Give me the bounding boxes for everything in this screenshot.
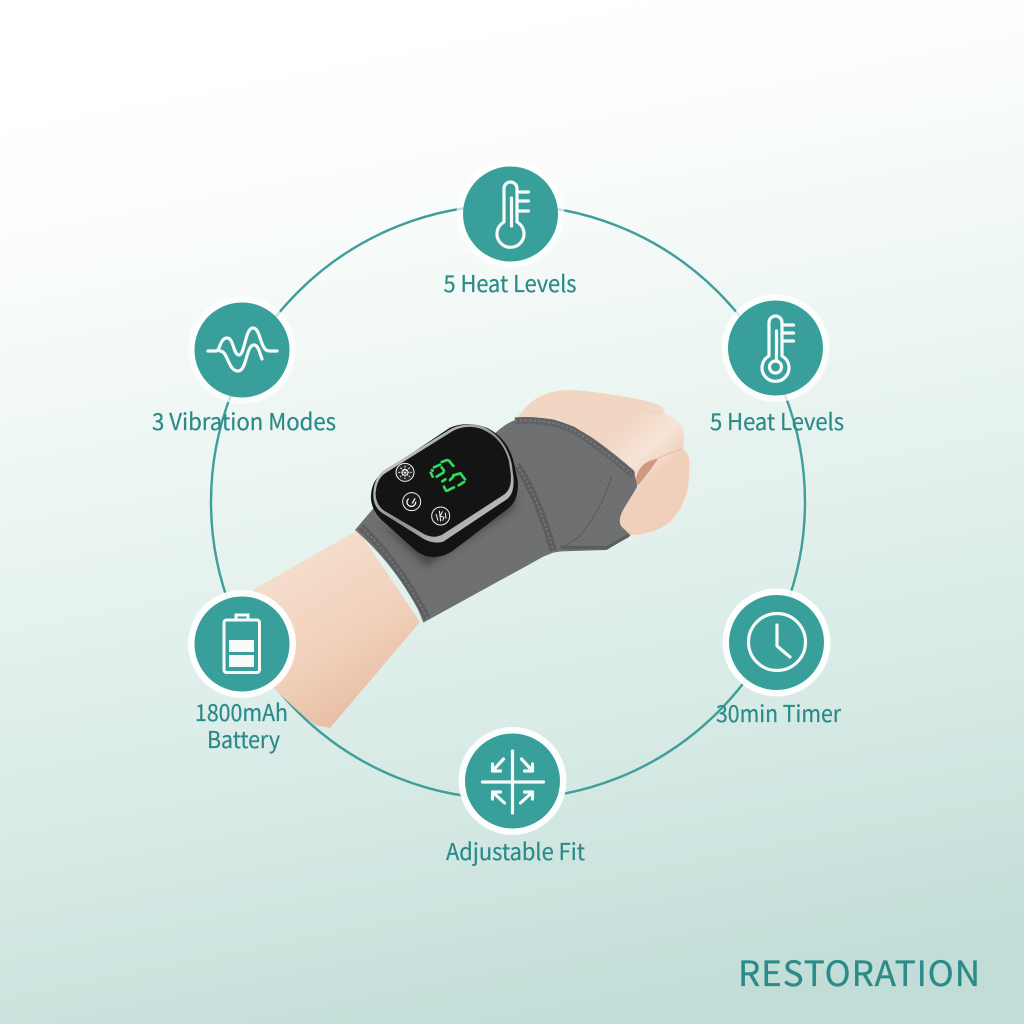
halo (458, 727, 566, 835)
feature: top heat levels (444, 160, 576, 299)
feature: adjustable fit (446, 727, 585, 867)
feature: vibration modes (152, 296, 336, 437)
halo (188, 296, 296, 404)
feature: timer (716, 588, 841, 729)
connecting ring (211, 205, 805, 799)
teal disc (194, 302, 290, 398)
device body (371, 424, 518, 557)
icon: clock (748, 614, 806, 670)
icon: cross and arrows (482, 751, 544, 813)
label: 30min Timer (716, 695, 841, 729)
stitched edges (515, 420, 633, 475)
halo (722, 588, 830, 696)
teal disc (463, 166, 558, 262)
power button (403, 493, 421, 511)
halo (456, 160, 564, 268)
feature: right heat levels (710, 294, 844, 437)
feature: battery: Battery (207, 721, 280, 755)
control unit (371, 424, 518, 557)
silver bezel (373, 425, 514, 543)
halo (722, 294, 830, 402)
hand (517, 390, 689, 535)
product photo: wrist wrap on arm (240, 390, 689, 728)
label: 3 Vibration Modes (152, 403, 336, 437)
icon: thermometer (762, 316, 794, 381)
teal disc (728, 300, 823, 396)
arm (240, 530, 420, 728)
label: 5 Heat Levels (710, 403, 844, 437)
vibration button (432, 507, 450, 525)
label: 1800mAh (195, 694, 288, 728)
shadow under device (380, 493, 517, 567)
icon: waveform (208, 328, 277, 371)
teal disc (465, 734, 560, 828)
LED display (431, 460, 465, 491)
heat button (396, 463, 414, 481)
icon: battery (224, 615, 260, 672)
label: Adjustable Fit (446, 833, 585, 867)
label: 5 Heat Levels (444, 265, 576, 299)
teal disc (194, 596, 290, 692)
icon: thermometer (497, 182, 528, 247)
wrist wrap band (355, 418, 637, 623)
halo (188, 590, 296, 698)
thumb crease (636, 458, 658, 485)
feature: battery (188, 590, 296, 755)
brand wordmark: RESTORATION (738, 946, 980, 997)
black screen (376, 427, 511, 537)
teal disc (729, 595, 824, 690)
